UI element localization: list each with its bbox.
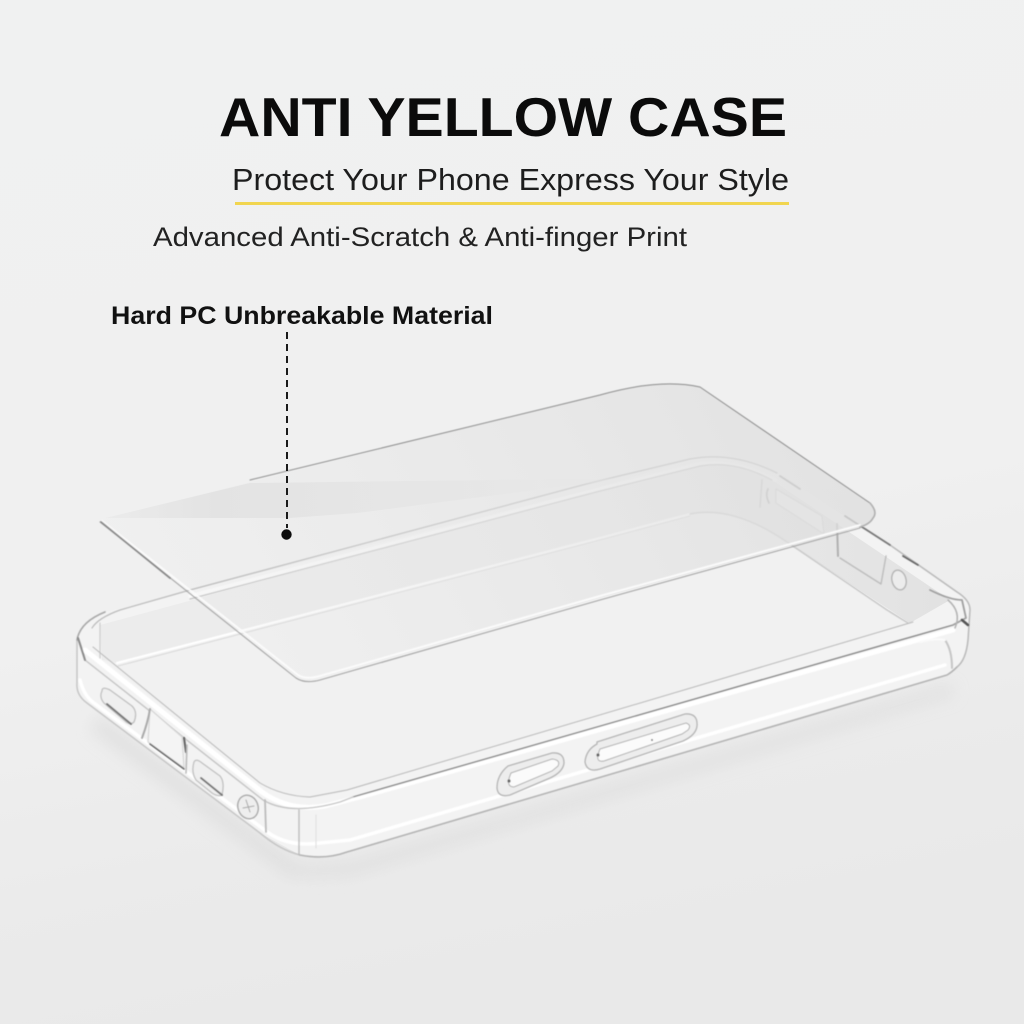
case shadow <box>90 684 955 878</box>
phone case <box>77 457 970 878</box>
far side button cutouts <box>760 480 908 591</box>
callout label: Hard PC Unbreakable Material <box>111 302 493 330</box>
charging and speaker cutouts <box>101 688 266 832</box>
subtitle: Protect Your Phone Express Your Style <box>232 162 789 197</box>
feature line: Advanced Anti-Scratch & Anti-finger Print <box>153 222 688 252</box>
inner wall, far side <box>100 463 950 663</box>
case interior floor <box>104 512 910 798</box>
white highlights <box>190 463 775 596</box>
sheet reflection band <box>105 478 650 518</box>
left speaker slot <box>101 688 136 724</box>
far rim <box>92 590 190 628</box>
near rim <box>93 622 913 797</box>
yellow underline <box>235 202 789 205</box>
sheet outline <box>100 384 875 682</box>
side buttons <box>497 714 697 796</box>
long button <box>585 714 697 770</box>
protective hard PC sheet <box>100 384 875 682</box>
callout dot <box>281 529 292 540</box>
right speaker slot <box>193 760 223 796</box>
title: ANTI YELLOW CASE <box>219 86 787 148</box>
case body <box>77 457 970 857</box>
USB port <box>142 709 187 773</box>
outer edge <box>77 640 300 855</box>
far right rim dark segments <box>780 476 800 489</box>
callout: hard PC material <box>111 302 493 540</box>
callout leader line <box>286 332 288 528</box>
small button <box>497 753 564 796</box>
lanyard hole <box>234 792 266 832</box>
far right corner <box>890 545 970 667</box>
left corner detail <box>78 638 85 660</box>
sheet fill <box>102 384 875 680</box>
case rim lines <box>77 457 970 857</box>
